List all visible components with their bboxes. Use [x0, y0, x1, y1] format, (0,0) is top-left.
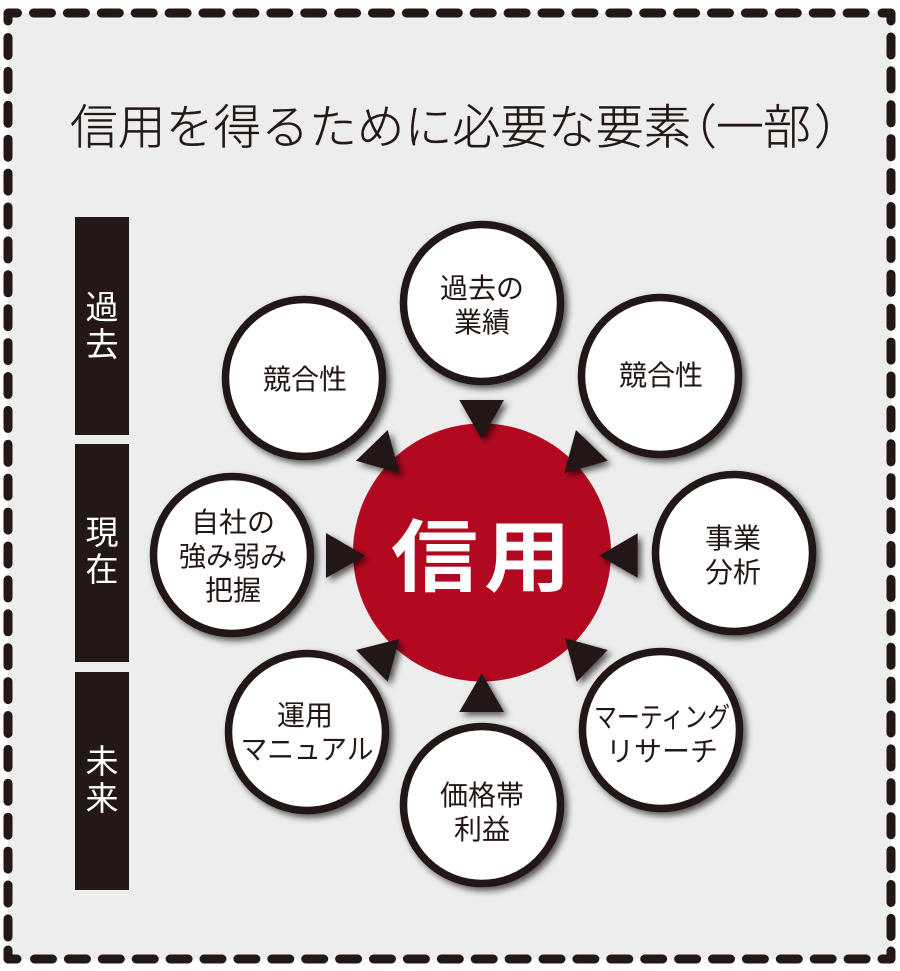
node circles	[154, 224, 812, 884]
node: past results: 過去の	[440, 273, 524, 304]
central circle: trust: 用	[484, 514, 571, 602]
title: （	[669, 102, 717, 155]
node: business analysis: 分析	[705, 557, 761, 588]
node: strengths and weaknesses: 強み弱み	[179, 541, 287, 572]
title: 信用を得るために必要な要素	[70, 102, 691, 155]
node: business analysis	[656, 474, 812, 632]
bar: past: 去	[86, 326, 118, 363]
central circle: trust	[353, 424, 611, 682]
title: 部	[763, 102, 811, 155]
node: operations manual: 運用	[277, 700, 333, 731]
node: marketing research: リサーチ	[606, 736, 718, 767]
node: price and profit: 利益	[454, 814, 510, 845]
node: operations manual: マニュアル	[240, 734, 374, 765]
bar: future: 未	[86, 743, 118, 780]
bar: present	[75, 444, 129, 662]
panel: timeline bars	[75, 217, 129, 890]
node: operations manual	[228, 654, 386, 810]
bar: past: 過	[86, 289, 118, 326]
node: competitiveness left: 競合性	[263, 364, 347, 395]
central circle: trust: 信	[391, 514, 478, 602]
arrow: top left	[356, 430, 399, 473]
title: 一	[716, 102, 764, 155]
node: competitiveness right: 競合性	[619, 360, 703, 391]
node: competitiveness left	[226, 300, 382, 456]
arrow: left	[326, 533, 365, 578]
arrow: top	[459, 400, 504, 439]
node: price and profit: 価格帯	[440, 780, 524, 811]
arrow: right	[599, 533, 638, 578]
node: past results	[404, 224, 560, 382]
node: strengths and weaknesses	[154, 476, 310, 634]
bar: future: 来	[86, 780, 118, 817]
node: price and profit	[404, 726, 560, 884]
arrow: top right	[564, 430, 608, 473]
node: business analysis: 事業	[705, 523, 761, 554]
bar: future	[75, 672, 129, 890]
arrow: bottom	[459, 673, 504, 712]
arrow: bottom right	[565, 638, 608, 682]
bar: present: 在	[86, 551, 118, 588]
bar: past	[75, 217, 129, 435]
node: past results: 業績	[454, 307, 510, 338]
node: strengths and weaknesses: 自社の	[191, 507, 275, 538]
title: ）	[814, 102, 862, 155]
bar: present: 現	[86, 514, 118, 551]
node: competitiveness right	[582, 298, 738, 454]
arrow: bottom left	[356, 639, 399, 682]
arrows pointing to centre	[326, 400, 638, 712]
node: marketing research	[582, 652, 740, 808]
node: marketing research: マーティング	[594, 702, 730, 733]
node: strengths and weaknesses: 把握	[205, 575, 261, 606]
